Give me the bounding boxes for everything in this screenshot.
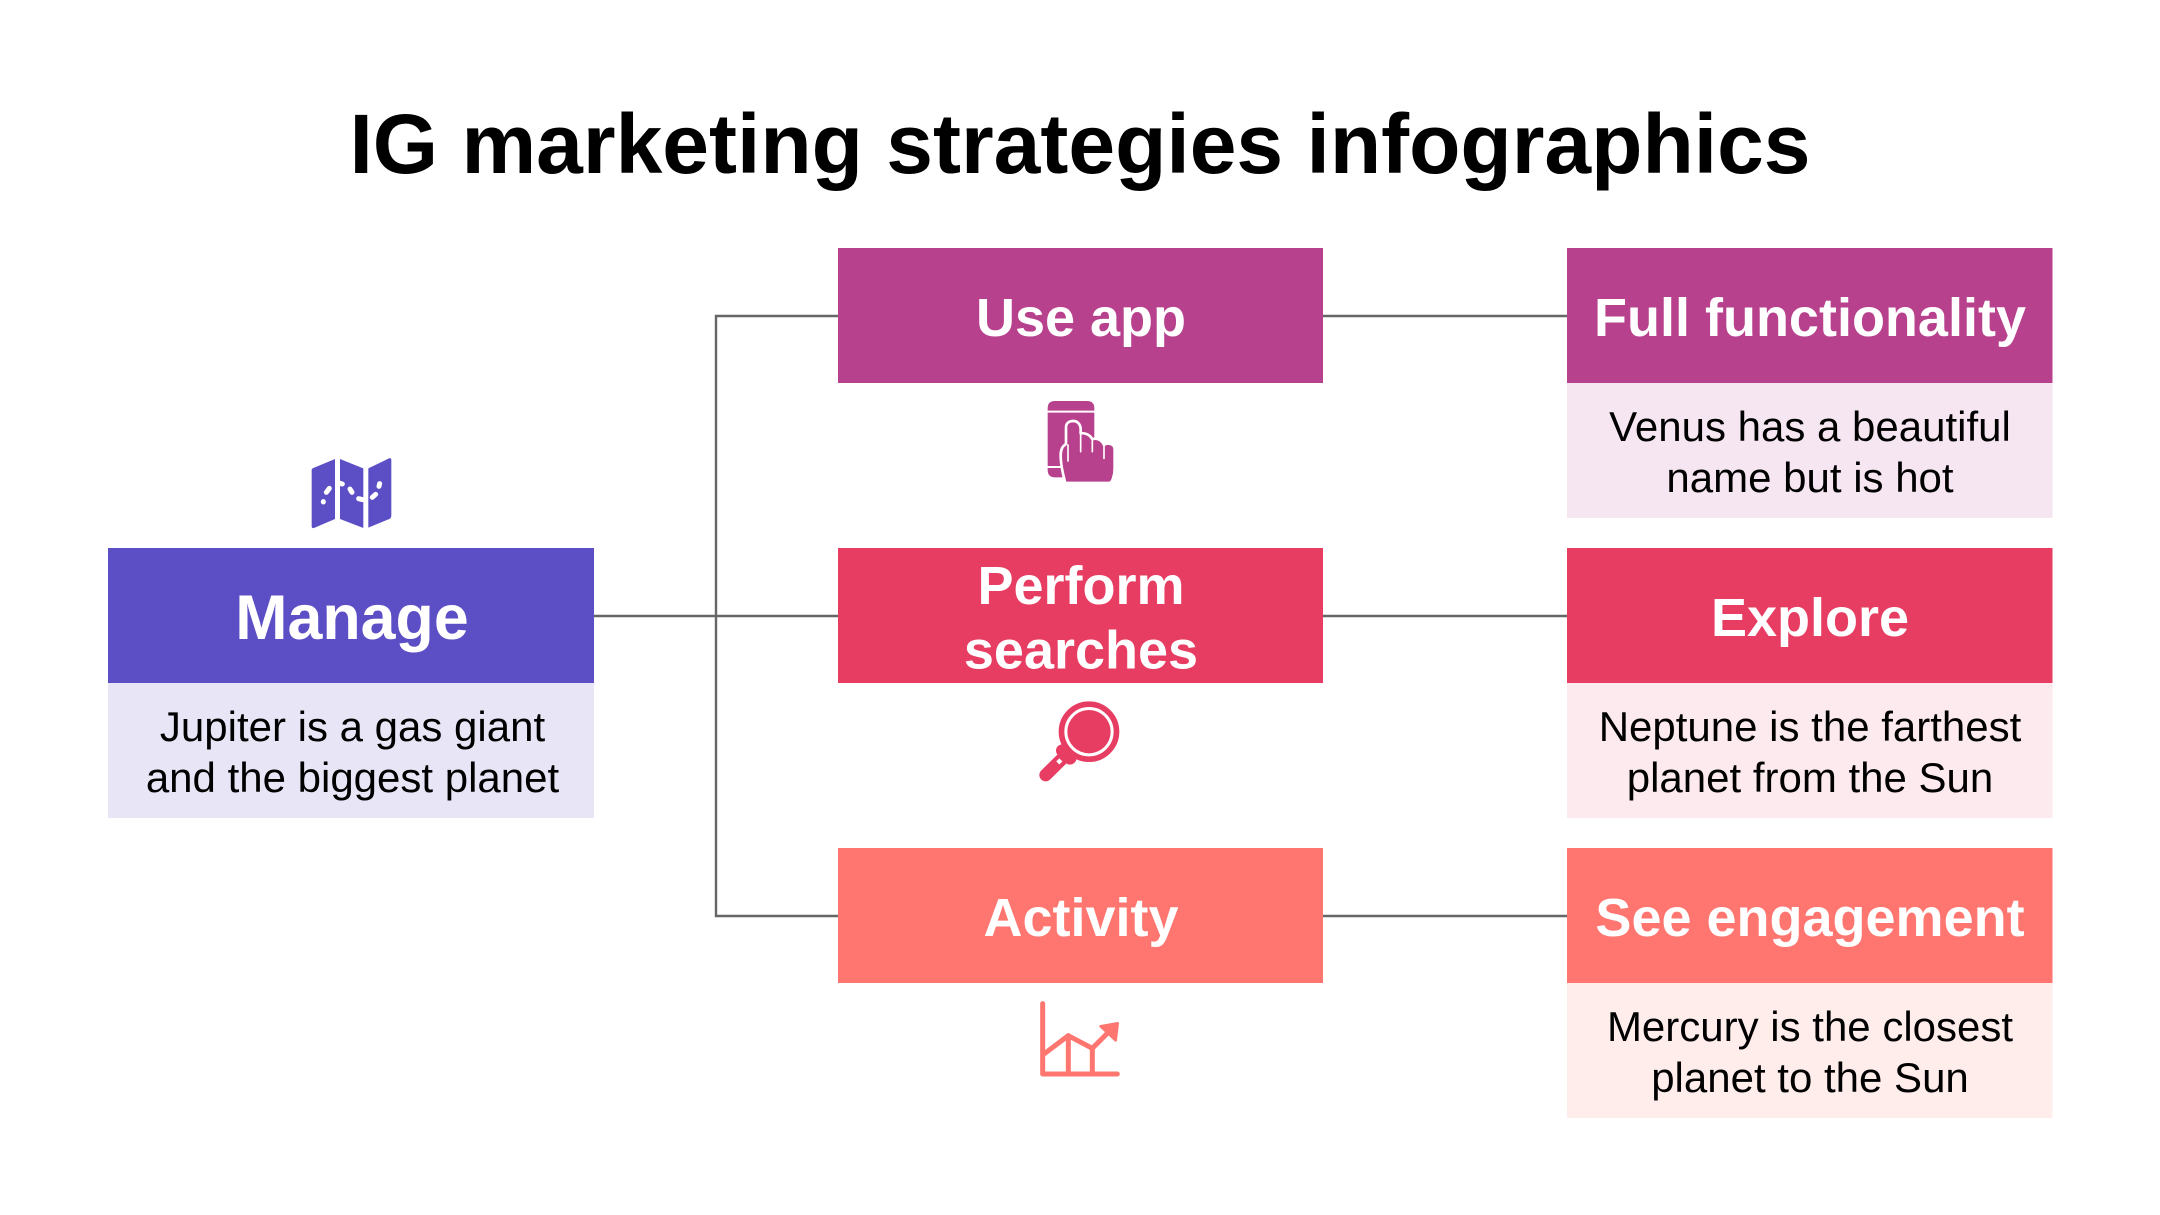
- heading: see engagement: See engagement: [1595, 888, 2025, 948]
- heading: full functionality: [1567, 248, 2052, 383]
- icon: growth chart: [1043, 1004, 1118, 1074]
- text block: explore description: planet from the Sun: [1627, 754, 1993, 801]
- text block: full functionality description: name but is hot: [1666, 454, 1954, 501]
- heading: manage: [108, 548, 594, 683]
- heading: activity: [838, 848, 1323, 983]
- icon: hand tapping phone: [1047, 401, 1115, 483]
- heading: full functionality: Full functionality: [1594, 288, 2026, 348]
- heading: perform searches: [838, 548, 1323, 683]
- icon: folded map: [312, 458, 391, 528]
- heading: use app: [838, 248, 1323, 383]
- panel: see engagement: [1567, 848, 2052, 1118]
- heading: use app: Use app: [976, 288, 1186, 348]
- text block: explore description: [1567, 683, 2052, 818]
- text block: manage description: and the biggest planet: [146, 754, 559, 801]
- heading: manage: Manage: [235, 583, 469, 653]
- panel: use app: [838, 248, 1323, 483]
- text block: manage description: Jupiter is a gas giant: [160, 703, 545, 750]
- icon: magnifying glass: [1046, 704, 1116, 775]
- heading: explore: Explore: [1711, 588, 1909, 648]
- text block: see engagement description: Mercury is the closest: [1607, 1003, 2013, 1050]
- heading: perform searches: Perform: [977, 556, 1185, 616]
- panel: full functionality: [1567, 248, 2052, 518]
- panel: activity: [838, 848, 1323, 1074]
- title: IG marketing strategies infographics: [349, 97, 1811, 191]
- text block: see engagement description: planet to the Sun: [1651, 1054, 1969, 1101]
- heading: explore: [1567, 548, 2052, 683]
- text block: full functionality description: Venus has a beautiful: [1609, 403, 2011, 450]
- heading: activity: Activity: [983, 888, 1179, 948]
- text block: explore description: Neptune is the farthest: [1599, 703, 2022, 750]
- panel: explore: [1567, 548, 2052, 818]
- heading: perform searches: searches: [964, 620, 1198, 680]
- heading: see engagement: [1567, 848, 2052, 983]
- text block: full functionality description: [1567, 383, 2052, 518]
- text block: manage description: [108, 683, 594, 818]
- panel: perform searches: [838, 548, 1323, 775]
- panel: manage: [108, 548, 594, 818]
- connector lines: [594, 316, 1567, 916]
- text block: see engagement description: [1567, 983, 2052, 1118]
